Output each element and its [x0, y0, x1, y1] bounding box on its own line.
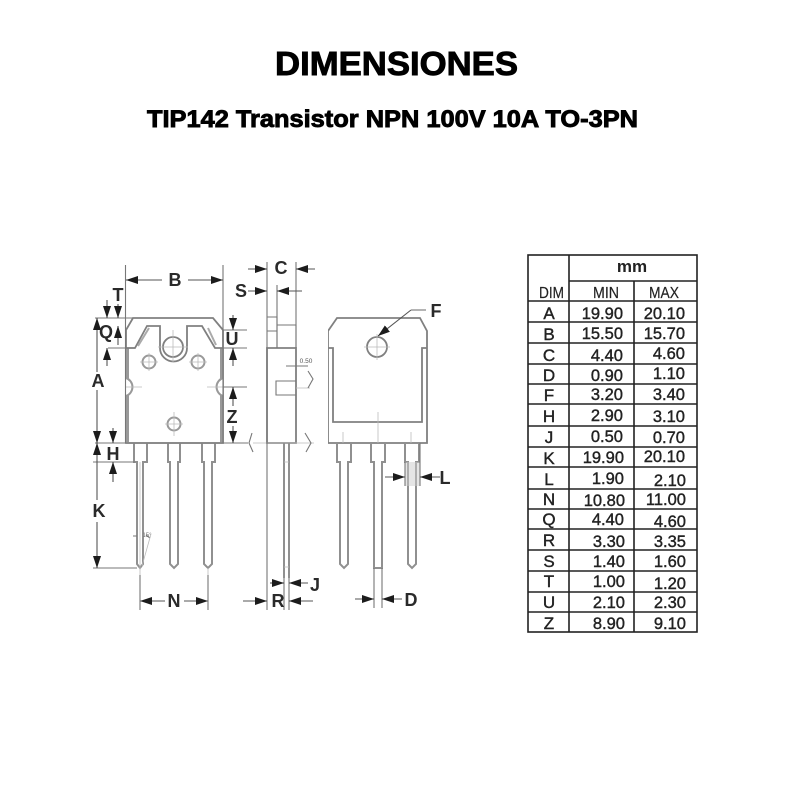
side view diagram of transistor: [235, 258, 320, 611]
table header: MAX: [649, 285, 679, 302]
table rows: 4.60: [653, 345, 685, 363]
table rows: Q: [542, 510, 556, 529]
table rows: L: [544, 470, 554, 489]
table rows: 4.40: [591, 347, 623, 365]
table rows: R: [543, 531, 555, 550]
table rows: 4.40: [592, 511, 624, 529]
dimension lines front view: 15°: [142, 533, 152, 539]
table rows: T: [544, 572, 554, 591]
dimension callouts rear view: F: [430, 301, 442, 321]
dimension letters front view: N: [168, 591, 180, 611]
table rows: N: [543, 490, 555, 509]
table rows: 2.10: [593, 594, 625, 612]
table grid: [528, 255, 697, 632]
table rows: S: [543, 552, 555, 571]
table rows: 19.90: [583, 449, 624, 467]
table rows: K: [543, 449, 555, 468]
table rows: 2.90: [591, 407, 623, 425]
table rows: 15.70: [644, 325, 685, 343]
table rows: 8.90: [593, 615, 625, 633]
table rows: 20.10: [644, 305, 685, 323]
dimension lines side view: S: [235, 281, 247, 301]
table rows: U: [543, 593, 555, 612]
dimension letters front view: K: [92, 501, 106, 521]
dimension letters front view: A: [92, 371, 104, 391]
dimension callouts rear view: [355, 301, 450, 610]
table rows: 15.50: [582, 325, 623, 343]
dimension letters front view: [92, 270, 238, 611]
table header: DIM: [539, 285, 564, 302]
table rows: 10.80: [584, 492, 625, 510]
table rows: 11.00: [646, 491, 686, 509]
dimension lines side view: R: [272, 591, 284, 611]
table header: mm: [617, 257, 647, 276]
dimension callouts rear view: L: [440, 468, 450, 488]
dimension letters front view: B: [168, 270, 182, 290]
table rows: 1.00: [593, 573, 625, 591]
table rows: 3.40: [653, 386, 685, 404]
dimension callouts rear view: D: [404, 590, 418, 610]
table rows: 3.10: [653, 408, 685, 426]
table rows: 1.20: [654, 575, 686, 593]
dimension letters front view: T: [112, 285, 124, 305]
dimension lines side view: C: [274, 258, 288, 278]
table rows: D: [543, 366, 555, 385]
table rows: 1.60: [654, 553, 686, 571]
table rows: 1.10: [653, 365, 685, 383]
table rows: B: [543, 325, 555, 344]
dimension letters front view: U: [226, 329, 238, 349]
title: DIMENSIONES: [275, 45, 518, 82]
table rows: 2.30: [654, 594, 686, 612]
dimension letters front view: Q: [99, 322, 113, 342]
subtitle: TIP142 Transistor NPN 100V 10A TO-3PN: [147, 106, 638, 133]
dimensions table: [528, 255, 697, 633]
table rows: 4.60: [654, 513, 686, 531]
table rows: F: [544, 386, 554, 405]
dimension letters front view: Z: [226, 407, 238, 427]
package body side: [253, 317, 314, 443]
package body rear: [328, 318, 427, 443]
table rows: 3.30: [593, 533, 625, 551]
table rows: Z: [544, 614, 554, 633]
table rows: 9.10: [654, 615, 686, 633]
table rows: 2.10: [654, 472, 686, 490]
front view diagram of transistor: [92, 265, 248, 611]
dimension lines side view: [235, 258, 320, 611]
table rows: 20.10: [644, 448, 685, 466]
side view lead: [284, 443, 289, 578]
package body front: [126, 318, 240, 443]
rear view leads: [337, 443, 420, 608]
table rows: 3.35: [654, 533, 686, 551]
front view leads: [134, 443, 215, 610]
table rows: H: [543, 407, 555, 426]
dimension lines side view: J: [310, 575, 320, 595]
table rows: 0.90: [591, 367, 623, 385]
table rows: A: [543, 304, 555, 323]
table rows: C: [543, 346, 555, 365]
table rows: 0.50: [591, 428, 623, 446]
table rows: [542, 304, 686, 633]
dimension lines side view: 0.50: [300, 358, 313, 365]
dimension letters front view: H: [106, 444, 120, 464]
table rows: J: [545, 428, 553, 447]
table header: [539, 257, 679, 302]
rear view diagram of transistor: [328, 301, 450, 610]
table rows: 19.90: [582, 305, 623, 323]
dimension lines front view: [93, 265, 248, 610]
table header: MIN: [593, 285, 619, 302]
table rows: 3.20: [591, 386, 623, 404]
table rows: 1.40: [593, 553, 625, 571]
table rows: 0.70: [653, 429, 685, 447]
table rows: 1.90: [592, 470, 624, 488]
